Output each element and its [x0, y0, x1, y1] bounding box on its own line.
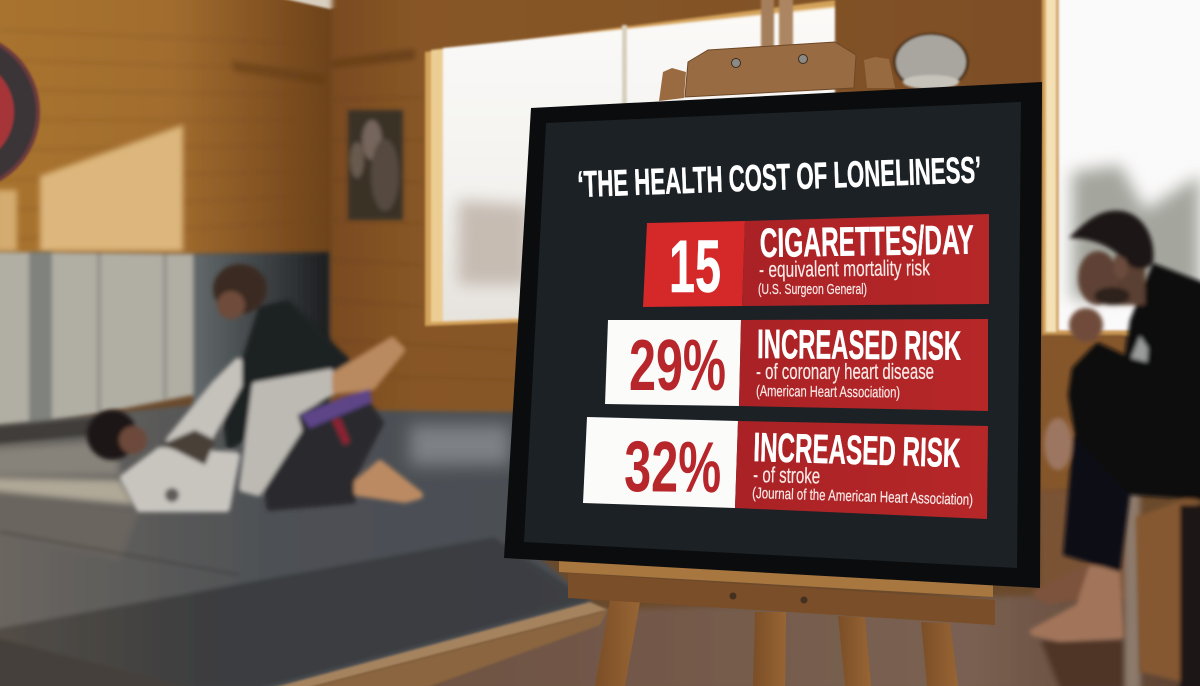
row 1 text box [742, 214, 989, 306]
row 1 number: 15 [669, 225, 721, 308]
bottom athlete arm [170, 362, 238, 448]
left wood wall [0, 0, 332, 255]
wood floor [420, 490, 1200, 686]
red belt tip [332, 418, 350, 445]
man's hand on chin [1069, 308, 1103, 342]
row 2 heading: INCREASED RISK [757, 321, 962, 369]
ceiling [245, 0, 410, 9]
jacket patch [1131, 336, 1148, 362]
row 3 text box [735, 421, 988, 519]
top athlete head [213, 264, 267, 319]
board frame [504, 82, 1042, 588]
row 2 source: (American Heart Association) [756, 383, 900, 402]
gi collar and hands [160, 430, 215, 465]
row 3 description: - of stroke [753, 462, 820, 488]
easel top clamp [685, 42, 856, 97]
row 2 number box [605, 320, 741, 406]
row 1 description: - equivalent mortality risk [759, 255, 931, 282]
framed board [504, 82, 1042, 588]
purple belt [300, 389, 372, 428]
bench [1136, 495, 1200, 686]
row 2 number: 29% [629, 326, 726, 406]
right wood wall [332, 0, 1060, 500]
man's trousers [1063, 430, 1200, 572]
gray wall panels [0, 252, 329, 428]
row 1 source: (U.S. Surgeon General) [758, 281, 867, 298]
gym floor mats [0, 405, 600, 686]
easel ledge [559, 560, 993, 597]
row 2 text box [739, 319, 988, 411]
board panel [524, 102, 1021, 568]
easel [559, 0, 995, 686]
chest patch [165, 488, 179, 502]
right window [1042, 0, 1200, 336]
row 3 heading: INCREASED RISK [753, 424, 961, 476]
top athlete torso [226, 304, 348, 445]
row 2: 29% coronary heart disease [605, 319, 988, 411]
bare foot on mat [358, 464, 419, 499]
left window [425, 0, 835, 326]
man's front foot and shin [1034, 570, 1120, 638]
bottom athlete torso [124, 451, 236, 508]
left athletes grappling [87, 264, 419, 508]
beam screws [730, 592, 808, 604]
clamp screws [732, 54, 808, 68]
row 1: 15 cigarettes per day [643, 214, 989, 308]
row 1 heading: CIGARETTES/DAY [759, 217, 974, 266]
row 3 source: (Journal of the American Heart Association) [752, 485, 973, 509]
lower right wall [1040, 335, 1125, 490]
sunlight patch on wall [0, 125, 183, 251]
man's back foot [1037, 570, 1090, 600]
bottom athlete head [87, 410, 147, 460]
easel legs [595, 600, 958, 686]
round wall emblem [0, 32, 40, 192]
wall clock [893, 33, 969, 91]
distant trees through left window [458, 200, 530, 285]
bare foot raised [336, 341, 401, 390]
easel lower beam [568, 573, 995, 625]
floor board below strip [300, 610, 608, 686]
top athlete legs [266, 402, 380, 507]
distant trees through right window [1072, 165, 1200, 300]
bottom athlete leg [243, 373, 332, 492]
row 3 number: 32% [624, 427, 722, 508]
easel mast [761, 0, 793, 50]
row 2 description: - of coronary heart disease [756, 359, 934, 384]
row 1 number box [643, 221, 745, 307]
easel side pegs [659, 57, 895, 101]
wall poster [348, 110, 403, 220]
mat edge wood strip [265, 602, 608, 686]
man's jacket [1068, 263, 1200, 500]
seated man on the right [1034, 211, 1200, 686]
man's head [1069, 211, 1153, 305]
man's hand on knee [1044, 418, 1072, 470]
row 3: 32% stroke [583, 417, 988, 519]
row 3 number box [583, 417, 738, 508]
